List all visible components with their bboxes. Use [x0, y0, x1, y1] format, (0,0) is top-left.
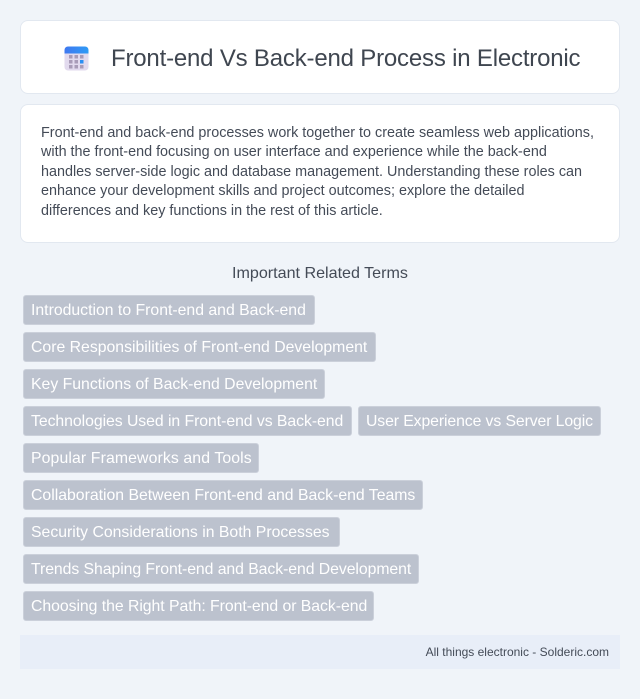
tag: Security Considerations in Both Processes: [31, 524, 330, 541]
footer: [20, 635, 620, 669]
tag: Key Functions of Back-end Development: [31, 376, 317, 393]
intro panel: [20, 104, 620, 243]
tag: [23, 332, 376, 362]
tag: [23, 554, 419, 584]
tag: Trends Shaping Front-end and Back-end Development: [31, 561, 411, 578]
intro text: enhance your development skills and project outcomes; explore the detailed: [41, 183, 524, 199]
section heading: Important Related Terms: [232, 264, 408, 282]
intro text: [41, 125, 594, 219]
tag: [23, 517, 340, 547]
tag: [23, 406, 352, 436]
tag: [23, 480, 423, 510]
tag: Core Responsibilities of Front-end Development: [31, 339, 367, 356]
intro text: Front-end and back-end processes work together to create seamless web applications,: [41, 125, 594, 141]
tag: [23, 443, 259, 473]
intro text: with the front-end focusing on user interface and experience while the back-end: [41, 144, 547, 160]
tag: [358, 406, 601, 436]
header panel: [20, 20, 620, 94]
tag: [23, 591, 374, 621]
intro text: handles server-side logic and database management. Understanding these roles can: [41, 164, 582, 180]
tag: Introduction to Front-end and Back-end: [31, 302, 306, 319]
tag: Popular Frameworks and Tools: [31, 450, 252, 467]
tag: Choosing the Right Path: Front-end or Back-end: [31, 598, 367, 615]
tag: [23, 295, 315, 325]
tag: [23, 369, 325, 399]
tag: Technologies Used in Front-end vs Back-end: [31, 413, 343, 430]
tag list: [23, 295, 601, 621]
tag: User Experience vs Server Logic: [366, 413, 593, 430]
icon: calendar: [64, 46, 88, 70]
footer text: All things electronic - Solderic.com: [426, 645, 609, 659]
intro text: differences and key functions in the rest of this article.: [41, 203, 383, 219]
tag: Collaboration Between Front-end and Back-end Teams: [31, 487, 415, 504]
title: Front-end Vs Back-end Process in Electronic: [111, 45, 580, 72]
